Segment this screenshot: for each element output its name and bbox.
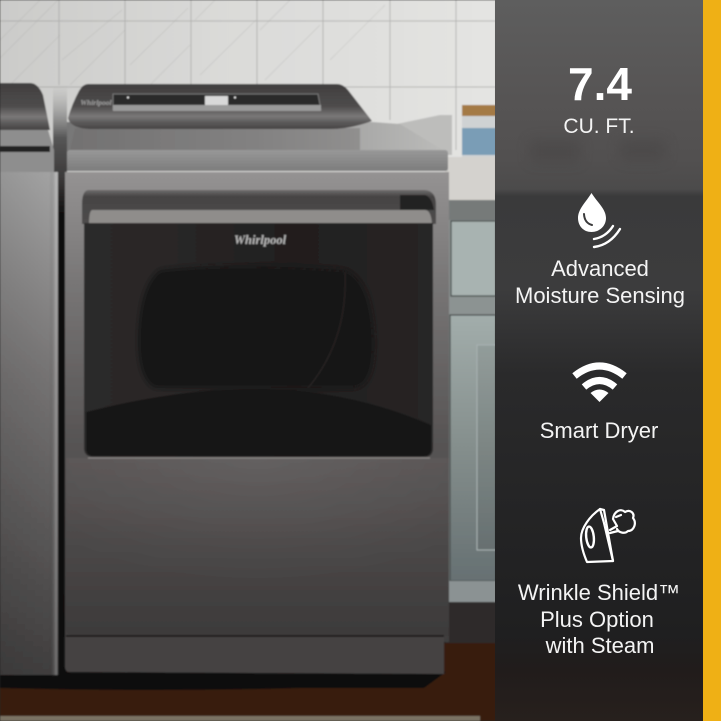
feature: wrinkle shield bbox=[518, 509, 680, 658]
drum window bbox=[138, 266, 374, 388]
left washer bbox=[0, 83, 58, 676]
drum floor bbox=[86, 389, 431, 456]
countertop bbox=[445, 157, 496, 200]
dryer bbox=[65, 84, 449, 674]
cabinet body bbox=[65, 172, 449, 642]
feature: advanced moisture sensing bbox=[515, 193, 685, 308]
lower cabinets bbox=[445, 200, 496, 644]
recess dark corner bbox=[400, 195, 434, 210]
door handle strip bbox=[89, 210, 432, 224]
lid reflection bbox=[70, 128, 360, 150]
lower front panel bbox=[66, 458, 449, 636]
feature: smart dryer bbox=[540, 366, 658, 443]
icon: iron with steam bbox=[581, 509, 635, 562]
kitchen background photo bbox=[0, 0, 496, 721]
capacity unit: CU. FT. bbox=[563, 115, 635, 138]
toe kick bbox=[65, 637, 444, 674]
door glass bbox=[84, 223, 433, 457]
feature: capacity bbox=[563, 58, 635, 138]
console bbox=[68, 84, 372, 129]
floor shadow under dryer bbox=[0, 672, 446, 690]
tiled wall bbox=[0, 0, 496, 175]
object on counter behind lid bbox=[392, 115, 452, 155]
lid top bbox=[67, 122, 448, 171]
control panel bbox=[113, 94, 321, 111]
yellow edge bar bbox=[703, 0, 721, 721]
feature panel bbox=[495, 0, 703, 721]
label line 3: with Steam bbox=[545, 633, 654, 658]
capacity number: 7.4 bbox=[568, 58, 632, 110]
icon: water drop with waves bbox=[578, 193, 620, 247]
rug bbox=[0, 716, 480, 721]
label: Wrinkle Shield™ bbox=[518, 580, 680, 605]
label line 2: Plus Option bbox=[540, 607, 654, 632]
wood floor bbox=[0, 643, 496, 721]
blurred background through panel bbox=[530, 140, 665, 162]
icon: wifi bbox=[574, 366, 624, 402]
label: Smart Dryer bbox=[540, 418, 658, 443]
label: Advanced bbox=[551, 256, 649, 281]
drum inner edge bbox=[308, 272, 345, 388]
gap shadow between machines bbox=[53, 85, 67, 675]
jar on counter bbox=[462, 105, 496, 158]
lid front edge bbox=[67, 150, 448, 171]
door recess bbox=[82, 190, 436, 224]
console brand: Whirlpool bbox=[80, 98, 113, 107]
label line 2: Moisture Sensing bbox=[515, 283, 685, 308]
door brand: Whirlpool bbox=[234, 233, 287, 247]
